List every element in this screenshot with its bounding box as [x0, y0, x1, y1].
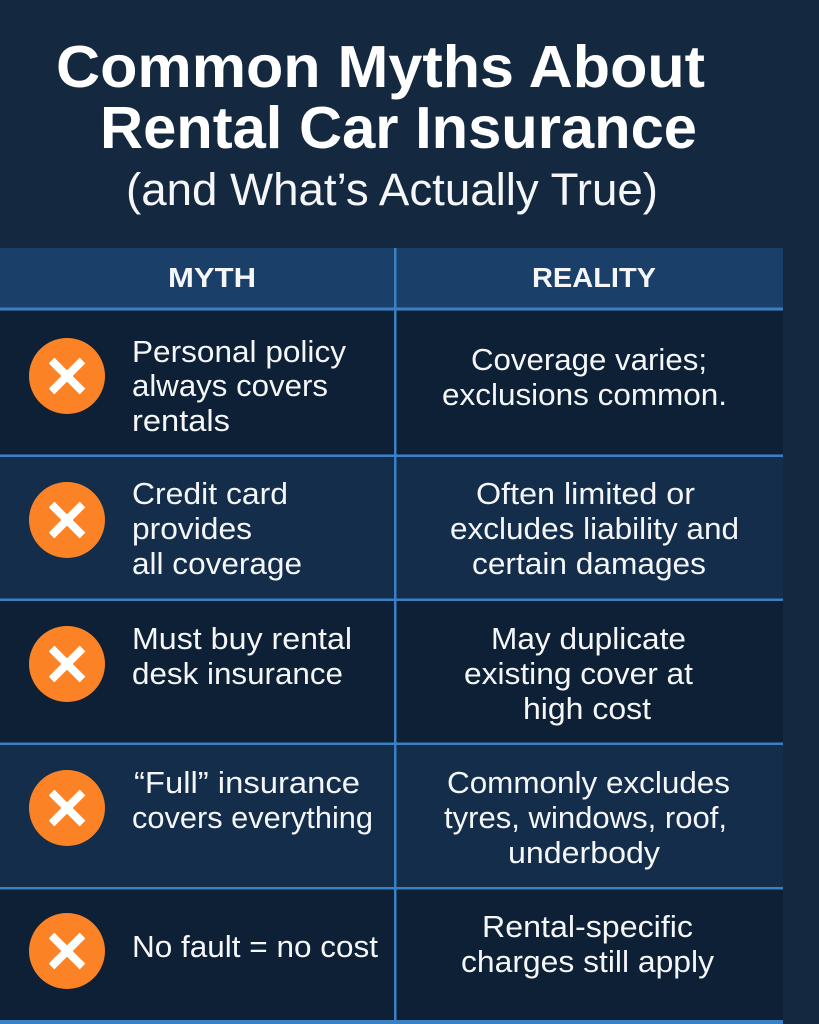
reality text 2: Often limited or — [476, 477, 695, 511]
reality text 4: underbody — [508, 836, 661, 870]
myth text 4: “Full” insurance — [134, 766, 360, 800]
reality text 5 — [461, 910, 715, 979]
reality text 2: certain damages — [472, 547, 706, 581]
icon: orange x — [29, 913, 105, 989]
myth text 1: always covers — [132, 369, 328, 403]
icon: orange x — [29, 338, 105, 414]
myth text 2: Credit card — [132, 477, 288, 511]
table header row — [0, 248, 783, 308]
reality text 3: existing cover at — [464, 657, 694, 691]
myth text 5: No fault = no cost — [132, 930, 379, 964]
row 2 — [0, 457, 783, 599]
myth text 2: all coverage — [132, 547, 302, 581]
reality text 4: tyres, windows, roof, — [444, 801, 727, 835]
reality text 1 — [442, 343, 727, 412]
icon: orange x — [29, 626, 105, 702]
myth text 3 — [132, 622, 352, 691]
myth text 3: Must buy rental — [132, 622, 352, 656]
myth text 2: provides — [132, 512, 252, 546]
table — [0, 248, 783, 1024]
reality text 4 — [444, 766, 730, 870]
myth text 1 — [132, 335, 347, 438]
myth text 4: covers everything — [132, 801, 373, 835]
table header row: REALITY — [532, 262, 656, 293]
myth text 3: desk insurance — [132, 657, 343, 691]
reality text 5: charges still apply — [461, 945, 715, 979]
reality text 3: high cost — [523, 692, 652, 726]
icon: orange x — [29, 770, 105, 846]
table header row: MYTH — [168, 262, 256, 293]
subtitle: (and What’s Actually True) — [126, 164, 658, 215]
reality text 1: exclusions common. — [442, 378, 727, 412]
myth text 4 — [132, 766, 373, 835]
myth text 2 — [132, 477, 302, 581]
title: Rental Car Insurance — [100, 95, 697, 161]
reality text 1: Coverage varies; — [471, 343, 707, 377]
row 3 — [0, 601, 783, 743]
row 4 — [0, 745, 783, 887]
title — [56, 34, 705, 161]
myth text 1: rentals — [132, 404, 230, 438]
row 5 — [0, 889, 783, 1020]
reality text 2: excludes liability and — [450, 512, 739, 546]
row 1 — [0, 311, 783, 454]
reality text 3 — [464, 622, 694, 726]
reality text 4: Commonly excludes — [447, 766, 730, 800]
reality text 5: Rental-specific — [482, 910, 693, 944]
reality text 2 — [450, 477, 739, 581]
myth text 1: Personal policy — [132, 335, 347, 369]
title: Common Myths About — [56, 34, 705, 100]
reality text 3: May duplicate — [491, 622, 686, 656]
icon: orange x — [29, 482, 105, 558]
